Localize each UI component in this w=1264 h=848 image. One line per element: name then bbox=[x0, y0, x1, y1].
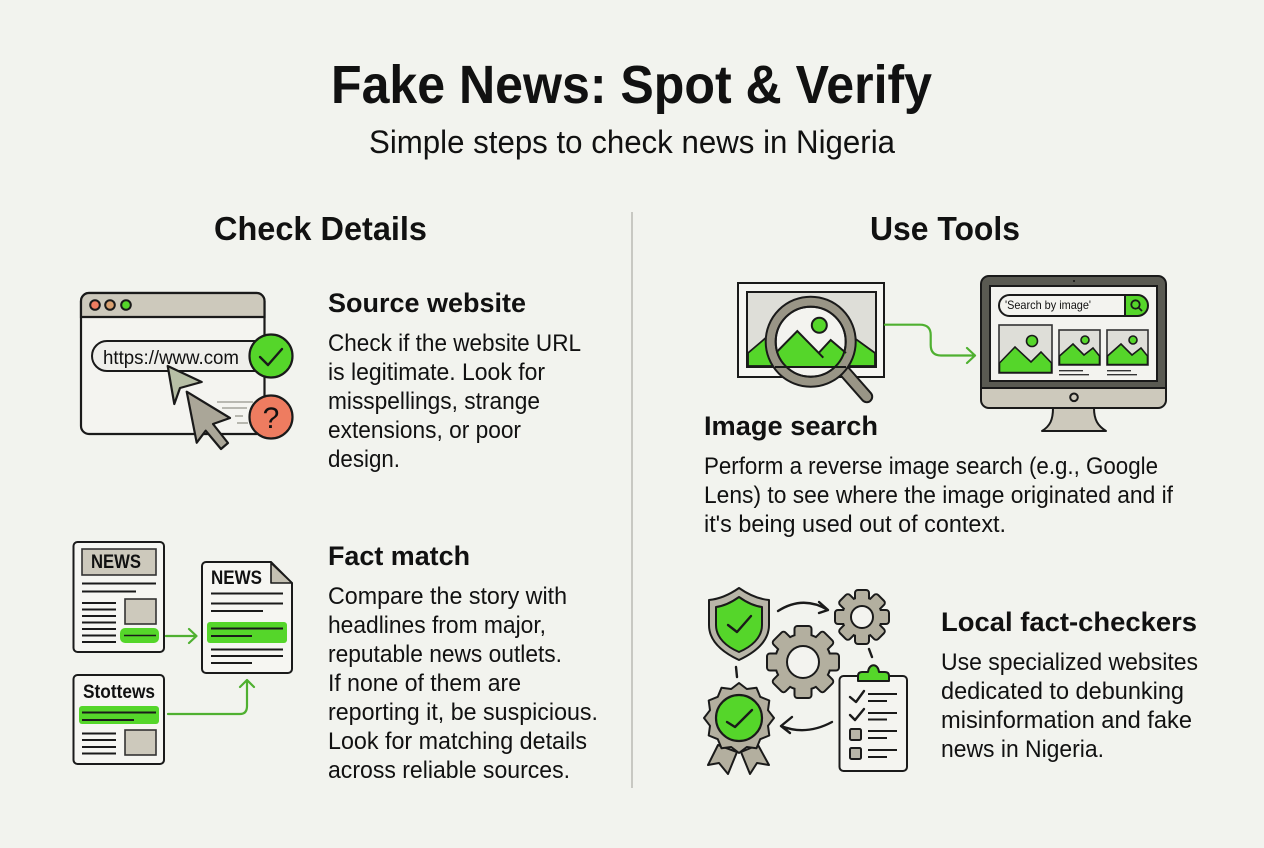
text: Local fact-checkers body: news in Nigeria. bbox=[941, 736, 1104, 763]
text: Source website body: extensions, or poor bbox=[328, 417, 521, 444]
heading: Image search: Image search bbox=[704, 411, 878, 441]
text: Fact match body: If none of them are bbox=[328, 670, 521, 697]
text: Fact match body: Compare the story with bbox=[328, 583, 567, 610]
panel: image search bbox=[704, 276, 1173, 538]
icon: small gear bbox=[836, 591, 888, 643]
text: Image search body bbox=[704, 453, 1173, 538]
icon: newspapers compared bbox=[74, 542, 292, 764]
text: Source website body: is legitimate. Look for bbox=[328, 359, 545, 386]
text: Fact match body: across reliable sources. bbox=[328, 757, 570, 784]
heading: Use Tools: Use Tools bbox=[870, 210, 1020, 247]
text: Image search body: it's being used out of context. bbox=[704, 511, 1006, 538]
text: Source website body: misspellings, strange bbox=[328, 388, 540, 415]
icon: desktop monitor with image search bbox=[981, 276, 1166, 431]
arrow: image to search bbox=[885, 325, 975, 363]
text: Local fact-checkers body: dedicated to debunking bbox=[941, 678, 1184, 705]
icon: shield, gears, clipboard and badge cycle bbox=[704, 588, 907, 774]
text: Fact match body: reputable news outlets. bbox=[328, 641, 562, 668]
icon: browser window with URL check: https://www.com bbox=[103, 348, 239, 369]
icon: browser window with URL check bbox=[81, 293, 292, 449]
panel: local fact-checkers bbox=[704, 588, 1198, 774]
text: Local fact-checkers body bbox=[941, 649, 1198, 763]
icon: newspapers compared: Stottews bbox=[83, 682, 155, 703]
text: Source website body: Check if the website URL bbox=[328, 330, 581, 357]
text: Fact match body bbox=[328, 583, 598, 784]
heading: Source website: Source website bbox=[328, 288, 526, 318]
icon: shield bbox=[709, 588, 769, 660]
panel: fact match bbox=[74, 541, 598, 784]
heading: Fact match: Fact match bbox=[328, 541, 470, 571]
text: Source website body bbox=[328, 330, 581, 473]
text: Local fact-checkers body: misinformation and fake bbox=[941, 707, 1192, 734]
icon: newspapers compared: NEWS bbox=[91, 552, 141, 573]
heading: Check Details: Check Details bbox=[214, 210, 427, 247]
icon: award badge bbox=[704, 683, 774, 774]
text: Fact match body: headlines from major, bbox=[328, 612, 546, 639]
text: Image search body: Lens) to see where the image originated and if bbox=[704, 482, 1173, 509]
icon: desktop monitor with image search: 'Search by image' bbox=[1005, 298, 1091, 312]
icon: browser window with URL check: ? bbox=[263, 402, 279, 435]
icon: large gear bbox=[768, 627, 838, 697]
icon: newspapers compared: NEWS bbox=[211, 568, 262, 589]
icon: clipboard checklist bbox=[840, 665, 907, 771]
text: Local fact-checkers body: Use specialized websites bbox=[941, 649, 1198, 676]
text: Source website body: design. bbox=[328, 446, 400, 473]
heading: Local fact-checkers: Local fact-checkers bbox=[941, 607, 1197, 637]
panel: source website bbox=[81, 288, 581, 473]
icon: picture under magnifying glass bbox=[738, 283, 884, 397]
text: Fact match body: Look for matching details bbox=[328, 728, 587, 755]
text: Fact match body: reporting it, be suspicious. bbox=[328, 699, 598, 726]
subtitle: Simple steps to check news in Nigeria bbox=[369, 124, 895, 160]
text: Image search body: Perform a reverse image search (e.g., Google bbox=[704, 453, 1158, 480]
title: Fake News: Spot & Verify bbox=[331, 55, 932, 115]
